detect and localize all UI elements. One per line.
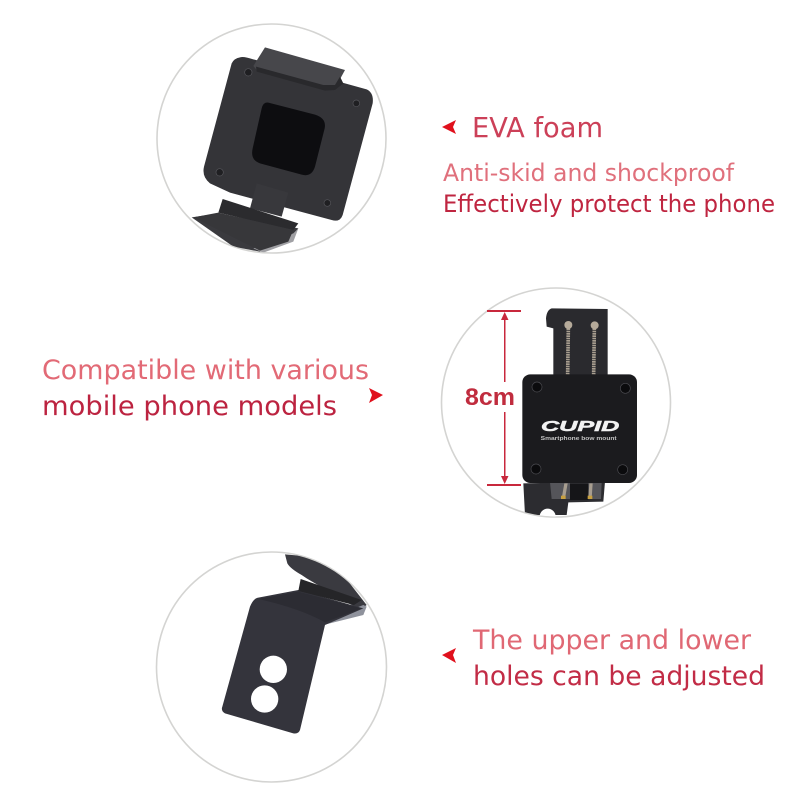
panel: adjustable holes photo circle: [156, 552, 386, 782]
text: the upper and lower: The upper and lower: [472, 625, 752, 656]
arrow: points to size photo: [369, 388, 383, 403]
heading: EVA foam: EVA foam: [472, 111, 603, 144]
icon: bent bracket with holes: [222, 554, 367, 734]
label: 8cm: 8cm: [465, 384, 515, 411]
icon: foam pad mount: [192, 47, 373, 253]
text: anti-skid: Anti-skid and shockproof: [443, 159, 735, 187]
panel: 8cm size photo circle: [442, 288, 670, 525]
arrow: points to holes photo: [442, 648, 456, 663]
text: Smartphone bow mount: Smartphone bow mount: [541, 436, 617, 442]
text: mobile phone models: mobile phone models: [42, 391, 337, 422]
text: holes can be adjusted: holes can be adjusted: [473, 661, 765, 692]
icon: phone mount front: [522, 308, 637, 525]
dimension line: 8cm: [487, 310, 521, 486]
text: compatible with various: Compatible with various: [42, 355, 369, 386]
logo: CUPID: CUPID: [541, 419, 620, 435]
arrow: points to EVA foam photo: [442, 120, 456, 134]
text: protect the phone: Effectively protect the phone: [443, 190, 775, 218]
panel: EVA foam photo circle: [157, 24, 386, 253]
